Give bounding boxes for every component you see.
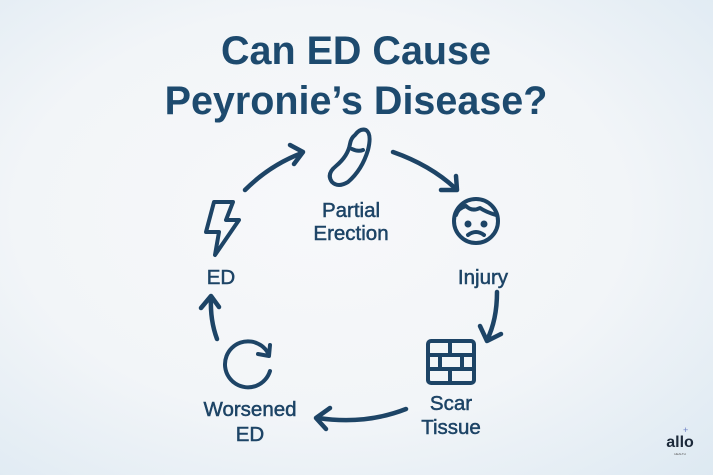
- labels: Scar: [430, 392, 472, 415]
- labels: Tissue: [421, 416, 481, 439]
- logo: allo: [666, 434, 694, 451]
- icon: sad face: [454, 199, 498, 243]
- labels: ED: [207, 266, 235, 289]
- cycle arrows: [201, 145, 501, 429]
- arrow: ED to partial erection: [245, 145, 303, 190]
- labels: ED: [236, 423, 264, 446]
- logo: +: [683, 425, 688, 435]
- icon: brick wall: [428, 341, 474, 383]
- labels: Worsened: [203, 398, 297, 421]
- title: Can ED Cause: [221, 29, 491, 73]
- labels: [203, 199, 509, 446]
- arrow: scar tissue to worsened ED: [316, 408, 406, 429]
- icon: refresh: [225, 341, 270, 387]
- logo: HEALTH: [674, 452, 686, 456]
- labels: Injury: [458, 266, 509, 289]
- labels: Erection: [313, 222, 389, 245]
- icon: partial erection: [330, 130, 370, 185]
- arrow: injury to scar tissue: [480, 292, 501, 341]
- title: [165, 29, 547, 123]
- logo: [666, 425, 694, 456]
- title: Peyronie’s Disease?: [165, 79, 547, 123]
- arrow: partial erection to injury: [393, 152, 457, 190]
- arrow: worsened ED to ED: [201, 296, 219, 339]
- icons: [206, 130, 498, 387]
- icon: lightning: [206, 202, 239, 255]
- labels: Partial: [322, 199, 380, 222]
